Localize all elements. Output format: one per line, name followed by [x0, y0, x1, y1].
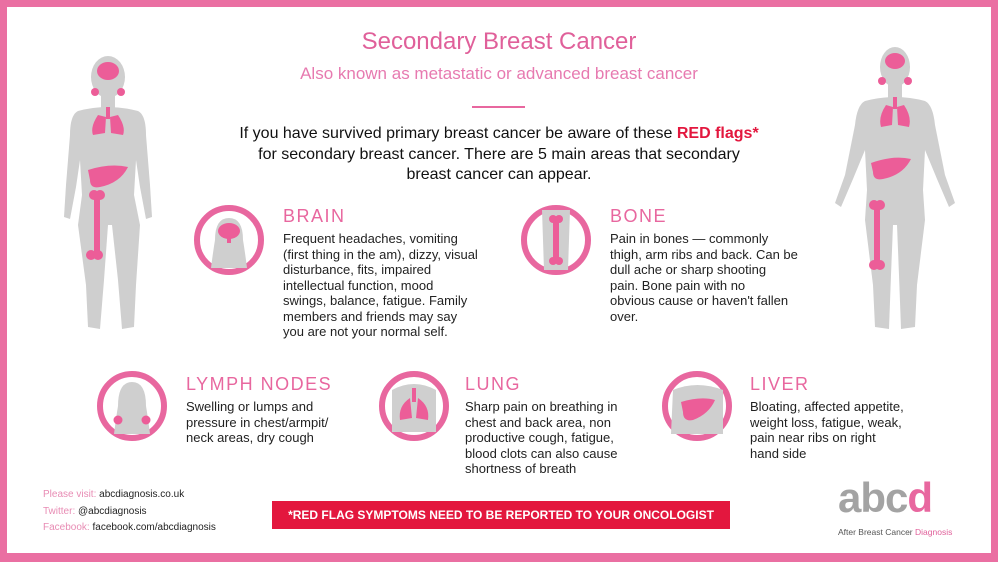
heading: LIVER	[750, 374, 810, 394]
red flag banner	[272, 501, 730, 529]
panel: lung	[379, 371, 618, 476]
subtitle: Also known as metastatic or advanced breast cancer	[300, 64, 698, 83]
text	[750, 399, 904, 460]
heading: BRAIN	[283, 206, 346, 226]
text: dull ache or sharp shooting	[610, 262, 766, 277]
text: swings, balance, fatigue. Family	[283, 293, 467, 308]
text: Bloating, affected appetite,	[750, 399, 904, 414]
text: you are not your normal self.	[283, 324, 448, 339]
text: neck areas, dry cough	[186, 430, 314, 445]
text: obvious cause or haven't fallen	[610, 293, 788, 308]
text: pain near ribs on right	[750, 430, 876, 445]
text: (first thing in the am), dizzy, visual	[283, 246, 478, 262]
text: Pain in bones — commonly	[610, 231, 768, 246]
panel: liver	[662, 371, 904, 460]
text	[186, 399, 328, 445]
text: pain. Bone pain with no	[610, 278, 745, 292]
intro text: If you have survived primary breast cancer be aware of these RED flags*	[239, 125, 759, 142]
text: Swelling or lumps and	[186, 399, 313, 414]
footer contact links: Twitter: @abcdiagnosis	[43, 506, 147, 516]
footer contact links: Please visit: abcdiagnosis.co.uk	[43, 489, 184, 500]
icon: lung	[379, 371, 449, 441]
intro text: for secondary breast cancer. There are 5 main areas that secondary	[258, 146, 740, 162]
panel: lymph nodes	[97, 371, 332, 445]
text: over.	[610, 308, 638, 324]
text: chest and back area, non	[465, 414, 611, 430]
red flag banner: *RED FLAG SYMPTOMS NEED TO BE REPORTED TO YOUR ONCOLOGIST	[288, 508, 714, 522]
text: pressure in chest/armpit/	[186, 414, 328, 430]
intro text: breast cancer can appear.	[406, 166, 592, 183]
intro text	[239, 125, 759, 183]
figure: right body	[835, 47, 955, 329]
icon: bone	[521, 205, 591, 275]
text: Frequent headaches, vomiting	[283, 231, 458, 246]
text: members and friends may say	[283, 308, 457, 324]
text: disturbance, fits, impaired	[283, 262, 431, 277]
text: hand side	[750, 446, 806, 460]
heading: LUNG	[465, 374, 521, 394]
icon: brain	[194, 205, 264, 275]
text: Sharp pain on breathing in	[465, 399, 618, 414]
text: weight loss, fatigue, weak,	[750, 414, 902, 430]
figure: left body	[64, 56, 152, 329]
text	[283, 231, 478, 339]
text	[465, 399, 618, 476]
heading: BONE	[610, 206, 667, 226]
panel: bone	[521, 205, 798, 324]
text: thigh, arm ribs and back. Can be	[610, 246, 798, 262]
footer contact links	[43, 489, 216, 533]
panel: brain	[194, 205, 478, 339]
logo: abcd: abcd	[838, 474, 932, 521]
logo: abcd	[838, 474, 952, 537]
icon: lymph nodes	[97, 371, 167, 441]
text: intellectual function, mood	[283, 278, 433, 292]
icon: liver	[662, 371, 732, 441]
title: Secondary Breast Cancer	[362, 28, 636, 55]
text	[610, 231, 798, 324]
divider line	[472, 106, 525, 108]
text: productive cough, fatigue,	[465, 430, 614, 445]
text: blood clots can also cause	[465, 446, 617, 460]
heading: LYMPH NODES	[186, 374, 332, 394]
text: shortness of breath	[465, 461, 576, 476]
footer contact links: Facebook: facebook.com/abcdiagnosis	[43, 522, 216, 533]
logo: abcd: After Breast Cancer Diagnosis	[838, 527, 952, 537]
